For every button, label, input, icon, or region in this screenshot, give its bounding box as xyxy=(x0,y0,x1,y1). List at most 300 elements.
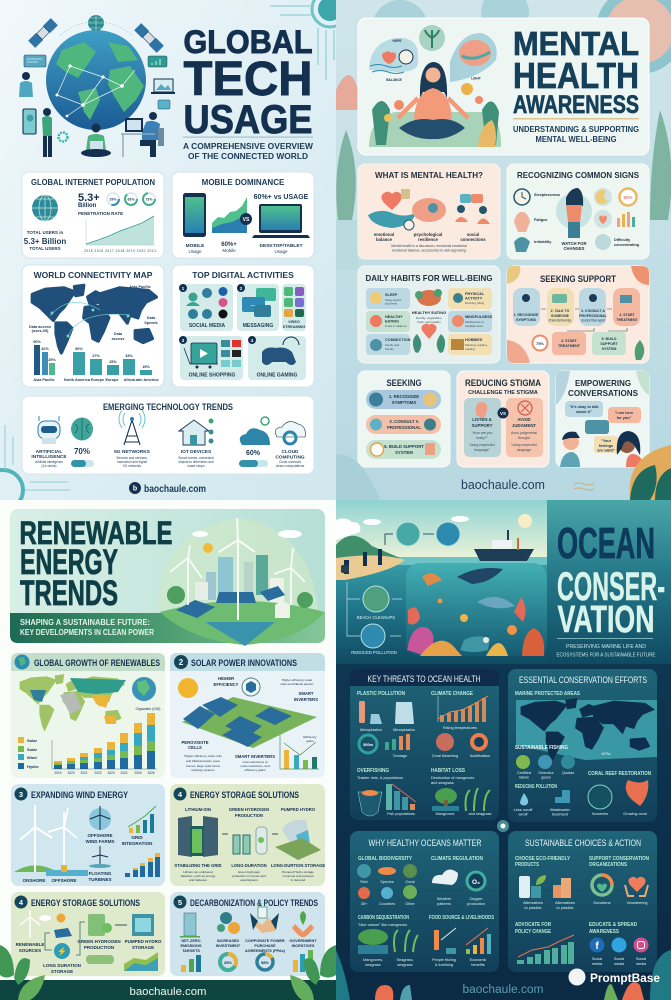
panel: why healthy oceans matter: Mangroves, xyxy=(363,958,383,962)
panel: why healthy oceans matter: seagrass xyxy=(365,963,381,967)
logo: promptbase watermark: PromptBase xyxy=(590,971,660,985)
panel: solar power innovations: Cost reductions of xyxy=(243,760,268,764)
panel: top digital activities: TOP DIGITAL ACTIVITIES xyxy=(192,270,294,280)
panel: world connectivity map: Data access xyxy=(29,325,51,329)
panel: essential conservation efforts: Growing coral xyxy=(623,812,647,816)
panel: emerging technology trends xyxy=(22,396,314,474)
title xyxy=(184,24,312,142)
panel: energy storage solutions bottom: SOURCES xyxy=(19,948,41,953)
illustration: clean energy city xyxy=(158,518,325,646)
logo: baochaule.com: baochaule.com xyxy=(144,484,206,495)
panel: reducing stigma: SUPPORT xyxy=(472,423,493,428)
panel: mobile dominance: 60%+ vs USAGE xyxy=(254,194,309,201)
panel: essential conservation efforts: Nurseries xyxy=(592,812,608,816)
panel: solar power innovations: SMART xyxy=(299,691,314,696)
panel: why healthy oceans matter: Coral xyxy=(405,880,415,884)
panel: global growth of renewables: 2021 xyxy=(80,771,88,775)
panel: mobile dominance: Usage xyxy=(188,249,202,254)
panel: recognizing common signs xyxy=(507,164,649,259)
panel: world connectivity map: Europe xyxy=(105,378,119,382)
panel: energy storage solutions top xyxy=(170,784,325,886)
panel: key threats to ocean health xyxy=(350,669,499,820)
panel: decarbonization and policy trends xyxy=(170,892,325,976)
panel: emerging technology trends: instruction and signal xyxy=(117,460,147,464)
icon: standing woman xyxy=(42,108,52,157)
icon: circuit decoration top right xyxy=(270,0,348,80)
panel: daily habits: HEALTHY xyxy=(385,315,403,319)
panel: why healthy oceans matter: O₂ xyxy=(472,879,480,886)
subtitle: OF THE CONNECTED WORLD xyxy=(188,152,308,161)
panel: energy storage solutions top: production in homes and xyxy=(232,874,266,878)
panel: seeking xyxy=(358,371,450,467)
panel: recognizing common signs: RECOGNIZING COMMON SIGNS xyxy=(517,170,639,180)
panel: top digital activities: 3 xyxy=(182,338,185,343)
panel: emerging technology trends: INTELLIGENCE xyxy=(31,454,67,460)
panel: daily habits: food heal xyxy=(385,302,397,306)
icon: earth globe network xyxy=(46,30,146,130)
panel: what is mental health: Mental health is a discussion, emotional emotional xyxy=(391,244,467,248)
panel: emerging technology trends: 70% xyxy=(74,447,90,456)
title xyxy=(557,519,665,641)
footer bar xyxy=(0,980,336,1000)
title: RENEWABLE xyxy=(20,515,172,551)
panel: mobile dominance xyxy=(172,172,314,258)
panel: emerging technology trends: 5G networks xyxy=(123,464,141,468)
icon: phone left xyxy=(23,109,36,134)
panel: decarbonization and policy trends: DECARBONIZATION & POLICY TRENDS xyxy=(190,898,318,908)
panel: solar power innovations: EFFICIENCY xyxy=(214,682,239,687)
panel: essential conservation efforts: SUSTAINABLE FISHING xyxy=(515,745,568,751)
panel: global internet population: 5.3+ xyxy=(78,192,100,204)
panel: empowering conversations: feelings xyxy=(599,444,613,448)
icon: circuit decoration bottom left xyxy=(0,425,70,510)
panel: seeking: SEEKING xyxy=(386,378,422,388)
panel: sustainable choices and action: AWARENESS xyxy=(589,929,620,935)
panel: essential conservation efforts: gears xyxy=(541,776,551,780)
panel: seeking support: 1. RECOGNIZE xyxy=(514,313,539,317)
panel: global growth of renewables xyxy=(11,653,165,778)
panel: energy storage solutions bottom: LONG DURATION xyxy=(43,963,81,968)
decorative background plants xyxy=(336,0,671,270)
panel: solar power innovations: Efficiency xyxy=(303,735,317,739)
panel: world connectivity map: (uses-05) xyxy=(32,329,49,333)
icon: corner leaves right xyxy=(290,945,336,1000)
subtitle: PRESERVING MARINE LIFE AND xyxy=(566,644,646,650)
panel: recognizing common signs: concentrating xyxy=(614,243,640,247)
panel: decarbonization and policy trends: 35% xyxy=(224,960,232,965)
panel: expanding wind energy: OFFSHORE xyxy=(51,878,77,883)
illustration: ocean hero: BEACH CLEANUPS xyxy=(357,615,395,620)
panel: seeking support: (friends/family) xyxy=(549,318,571,322)
panel: decarbonization and policy trends: EMISSIONS xyxy=(180,944,202,948)
panel: reducing stigma: CHALLENGE THE STIGMA xyxy=(468,390,538,396)
panel: key threats to ocean health: HABITAT LOSS xyxy=(431,768,466,774)
panel: seeking support: SYMPTOMS xyxy=(516,318,537,322)
panel: solar power innovations: Higher efficiency solar cells xyxy=(184,754,222,758)
panel: daily habits: ACTIVITY xyxy=(465,296,483,300)
panel: sustainable choices and action: Social xyxy=(614,957,624,961)
panel: energy storage solutions top: LITHIUM-ION xyxy=(185,807,211,812)
panel: daily habits: CONNECTION xyxy=(385,338,411,342)
panel: solar power innovations: costs reductions, and xyxy=(240,764,270,768)
panel: world connectivity map: Asia Pacific xyxy=(33,378,55,382)
panel: seeking support: 5. BUILD xyxy=(602,337,617,341)
panel: hero xyxy=(10,509,325,646)
panel: decarbonization and policy trends: PURCHASE xyxy=(254,944,276,948)
panel: ocean conservation infographic xyxy=(336,500,671,1000)
panel: energy storage solutions bottom: ENERGY STORAGE SOLUTIONS xyxy=(31,898,140,908)
panel: key threats to ocean health: Coral bleaching xyxy=(432,754,458,758)
panel: sustainable choices and action: media xyxy=(614,962,625,966)
icon: laptop right xyxy=(151,79,175,94)
panel: global internet population: 29% xyxy=(109,198,117,202)
panel: energy storage solutions bottom xyxy=(11,892,165,976)
panel: why healthy oceans matter: 35+ xyxy=(361,902,368,906)
panel: energy storage solutions bottom: PUMPED HYDRO xyxy=(125,939,162,944)
panel: essential conservation efforts xyxy=(508,669,657,822)
panel: sustainable choices and action: Alternatives xyxy=(523,901,543,905)
panel: mobile dominance: VS xyxy=(243,217,250,223)
panel: what is mental health: resilience xyxy=(418,237,439,242)
icon: chat bubble left xyxy=(24,55,46,67)
panel: global growth of renewables: 2019 xyxy=(54,771,62,775)
panel: sustainable choices and action: CHOOSE ECO-FRIENDLY xyxy=(515,856,571,862)
panel: seeking support: 4. START xyxy=(619,313,636,317)
panel: world connectivity map: WORLD CONNECTIVITY MAP xyxy=(34,270,153,280)
panel: essential conservation efforts: treatment xyxy=(552,812,569,816)
panel: seeking: SYMPTOMS xyxy=(392,400,416,405)
panel: key threats to ocean health: Fish populations xyxy=(387,812,415,816)
panel: reducing stigma: REDUCING STIGMA xyxy=(465,378,541,388)
panel: daily habits: Family and xyxy=(385,343,400,347)
panel: daily habits: SLEEP xyxy=(385,293,398,297)
panel: why healthy oceans matter: Species xyxy=(380,880,394,884)
title: TECH xyxy=(184,53,312,106)
panel: why healthy oceans matter: production xyxy=(467,902,485,906)
panel: global growth of renewables: 2023 xyxy=(107,771,115,775)
panel: essential conservation efforts: Wastewater xyxy=(550,808,571,812)
panel: seeking support xyxy=(507,266,649,363)
panel: emerging technology trends: Smart homes, connected xyxy=(178,456,214,460)
panel: empowering conversations: EMPOWERING xyxy=(575,378,631,388)
panel: daily habits: MINDFULNESS xyxy=(465,315,493,319)
panel: expanding wind energy: EXPANDING WIND ENERGY xyxy=(31,790,128,800)
panel: energy storage solutions top: PUMPED HYDRO xyxy=(281,807,316,812)
subtitle: A COMPREHENSIVE OVERVIEW xyxy=(183,142,313,151)
panel: emerging technology trends: ARTIFICIAL xyxy=(36,449,62,455)
panel: why healthy oceans matter: GLOBAL BIODIVERSITY xyxy=(358,856,413,862)
panel: solar power innovations xyxy=(170,653,325,778)
panel: daily habits: Sleep Hours, xyxy=(385,298,402,302)
panel: daily habits: Fruits in salad so xyxy=(385,324,407,328)
panel: global growth of renewables: 2024 xyxy=(120,771,128,775)
footer url: baochaule.com xyxy=(462,984,544,996)
panel: solar power innovations: homes, large solar farms xyxy=(186,764,220,768)
subtitle: UNDERSTANDING & SUPPORTING xyxy=(513,125,639,134)
panel: decarbonization and policy trends: 5 xyxy=(178,898,182,907)
panel: top digital activities: 1 xyxy=(182,286,185,291)
illustration: ocean hero: REDUCED POLLUTION xyxy=(351,650,397,655)
panel: daily habits: HOBBIES xyxy=(465,338,483,342)
panel: energy storage solutions top: STABILIZING THE GRID xyxy=(174,863,222,868)
panel: empowering conversations: about it" xyxy=(576,410,592,414)
panel: sustainable choices and action: to plastics xyxy=(525,906,542,910)
panel: expanding wind energy: INTEGRATION xyxy=(122,841,152,846)
panel: daily habits: Running, lifting xyxy=(465,301,485,305)
panel: mobile dominance: Mobile xyxy=(222,248,236,253)
panel: daily habits: PHYSICAL xyxy=(465,292,485,296)
icon: gear xyxy=(58,132,68,142)
panel: world connectivity map: North America Europe xyxy=(64,378,104,382)
title xyxy=(20,515,172,613)
panel: world connectivity map: 60% xyxy=(33,340,41,344)
panel: global internet population: TOTAL USERS in xyxy=(27,230,63,235)
panel: reducing stigma: "How are you xyxy=(472,431,492,435)
panel: daily habits: meditate area xyxy=(465,324,483,328)
panel: seeking support: 4. START xyxy=(561,339,578,343)
panel: sustainable choices and action: ADVOCATE FOR xyxy=(515,922,551,928)
title: USAGE xyxy=(184,98,312,142)
title: HEALTH xyxy=(513,55,639,96)
panel: recognizing common signs: Irritability xyxy=(534,240,552,244)
panel: empowering conversations: for you" xyxy=(617,416,632,420)
panel: energy storage solutions bottom: STORAGE xyxy=(132,945,154,950)
panel: essential conservation efforts: wnoff xyxy=(518,812,528,816)
panel: seeking support: TREATMENT xyxy=(616,318,639,322)
panel: emerging technology trends: Artificial intelligence xyxy=(35,460,63,464)
panel: world connectivity map: 15% xyxy=(142,365,150,369)
panel: energy storage solutions top: commute and pumped xyxy=(283,874,314,878)
panel: what is mental health: emotional balance, accessories to well-approving xyxy=(392,248,466,252)
panel: reducing stigma: really?" xyxy=(476,436,489,440)
panel: reducing stigma: AVOID xyxy=(517,417,531,422)
icon: top mini globe xyxy=(60,15,132,35)
panel: expanding wind energy: GRID xyxy=(131,835,143,840)
panel: seeking support: SOMEONE xyxy=(551,314,570,318)
panel: solar power innovations: tracking systems xyxy=(191,768,215,772)
panel: daily habits: friends xyxy=(385,347,394,351)
panel: global internet population: PENETRATION RATE xyxy=(78,211,123,216)
panel: reducing stigma: thought xyxy=(518,436,530,440)
panel: sustainable choices and action: to plastics xyxy=(557,906,574,910)
panel: world connectivity map: Data xyxy=(114,332,123,336)
panel: emerging technology trends: 5G NETWORKS xyxy=(114,449,151,455)
panel: world connectivity map: Data xyxy=(147,316,156,320)
panel: mobile dominance: 60%+ xyxy=(221,242,237,248)
panel: why healthy oceans matter: People fishing xyxy=(432,958,456,962)
panel: seeking support: SYSTEM xyxy=(602,347,616,351)
panel: energy storage solutions top: Lithium-ion embraced xyxy=(183,870,213,874)
panel: essential conservation efforts: Certified xyxy=(517,771,531,775)
panel: energy storage solutions top: in demand xyxy=(291,878,306,882)
panel: sustainable choices and action: f xyxy=(595,941,599,952)
panel: world connectivity map xyxy=(22,265,164,387)
panel: top digital activities xyxy=(172,265,314,387)
panel: solar power innovations: PEROVSKITE xyxy=(182,740,209,745)
subtitle xyxy=(20,618,154,637)
panel: seeking support: doctor/therapist xyxy=(581,318,605,322)
subtitle xyxy=(183,136,313,161)
panel: solar power innovations: SOLAR POWER INNOVATIONS xyxy=(191,658,297,668)
panel: essential conservation efforts: CORAL REEF RESTORATION xyxy=(588,771,651,777)
panel: key threats to ocean health: Microplastics xyxy=(393,728,415,732)
panel: mobile dominance: DESKTOP/TABLET xyxy=(260,243,303,249)
panel: energy storage solutions bottom: GREEN HYDROGEN xyxy=(77,939,121,944)
subtitle: KEY DEVELOPMENTS IN CLEAN POWER xyxy=(20,628,154,637)
icon: woman with phone xyxy=(19,72,33,97)
panel: daily habits: HEALTHY EATING xyxy=(412,310,446,315)
subtitle xyxy=(513,118,639,144)
panel: emerging technology trends: COMPUTING xyxy=(275,454,305,460)
panel: energy storage solutions bottom: RENEWABLE xyxy=(16,942,44,947)
panel: seeking: PROFESSIONAL xyxy=(387,425,421,430)
panel: energy storage solutions top: Green hydrogen xyxy=(238,870,260,874)
panel: seeking support: 2. TALK TO xyxy=(551,309,570,313)
panel: emerging technology trends: 60% xyxy=(246,450,261,457)
panel: key threats to ocean health: Acidification xyxy=(470,754,490,758)
panel: global growth of renewables: Hydro xyxy=(27,764,39,769)
panel: global internet population: GLOBAL INTERNET POPULATION xyxy=(31,178,155,187)
icon: sitting person xyxy=(81,124,111,157)
subtitle xyxy=(556,638,656,658)
title: TRENDS xyxy=(20,574,118,613)
panel: decarbonization and policy trends: AGREEMENTS (PPAs) xyxy=(245,949,286,953)
panel: energy storage solutions bottom: ⚡ xyxy=(57,946,67,956)
title xyxy=(513,25,639,119)
panel: recognizing common signs: CHANGES xyxy=(564,246,585,251)
panel: reducing stigma: language" xyxy=(474,448,491,452)
footer bar: baochaule.com xyxy=(130,986,206,998)
panel: emerging technology trends: Cloud connects xyxy=(279,460,301,464)
title: ENERGY xyxy=(20,543,118,582)
panel: solar power innovations: Higher efficiency solar xyxy=(282,678,312,682)
panel: daily habits: Painting, reading, xyxy=(465,343,488,347)
panel: empowering conversations: are valid" xyxy=(597,448,615,452)
panel: solar power innovations: gains xyxy=(306,739,314,743)
panel: seeking support: 75% xyxy=(536,341,544,346)
panel: key threats to ocean health: Microplastics xyxy=(360,728,382,732)
panel: emerging technology trends: Sensors and services, xyxy=(116,456,148,460)
panel: essential conservation efforts: REDUCING POLLUTION xyxy=(515,784,557,790)
panel: decarbonization and policy trends: 58% xyxy=(261,960,269,965)
panel: hero xyxy=(358,18,649,155)
panel: emerging technology trends: smart shops xyxy=(187,464,205,468)
panel: world connectivity map: Asia-Pacific xyxy=(129,285,151,289)
panel: seeking support: SEEKING SUPPORT xyxy=(540,274,616,284)
panel: sustainable choices and action: ORGANIZATIONS xyxy=(589,862,628,868)
panel: top digital activities: MESSAGING xyxy=(243,323,273,329)
panel: expanding wind energy: FLOATING xyxy=(89,871,112,876)
panel: daily habits: DAILY HABITS FOR WELL-BEING xyxy=(366,273,493,283)
panel: why healthy oceans matter: CLIMATE REGULATION xyxy=(431,856,483,862)
panel: top digital activities: ... xyxy=(251,302,256,308)
panel: world connectivity map: 27% xyxy=(92,354,100,358)
icon: satellite right xyxy=(134,23,164,53)
panel: empowering conversations xyxy=(556,371,649,467)
illustration: meditating woman xyxy=(369,25,501,147)
subtitle: SHAPING A SUSTAINABLE FUTURE: xyxy=(20,618,150,627)
illustration: meditating woman: BALANCE xyxy=(386,78,402,82)
panel: mobile dominance: MOBILE DOMINANCE xyxy=(202,178,285,187)
panel: sustainable choices and action: Alternatives xyxy=(555,901,575,905)
panel: world connectivity map: 42% xyxy=(41,347,49,351)
panel: energy storage solutions top: PRODUCTION xyxy=(235,813,263,818)
panel: essential conservation efforts: MARINE PROTECTED AREAS xyxy=(515,691,581,697)
panel: key threats to ocean health: Mangroves xyxy=(436,812,454,816)
panel: global growth of renewables: 2020 xyxy=(67,771,75,775)
panel: daily habits: reading xyxy=(465,347,475,351)
panel: energy storage solutions top: LONG-DURATION xyxy=(231,863,267,868)
panel: expanding wind energy: ONSHORE xyxy=(23,878,45,883)
panel: reducing stigma: Asso judgmental xyxy=(511,431,537,435)
icon: corner leaves left xyxy=(0,945,45,1000)
panel: key threats to ocean health: 300m xyxy=(363,742,374,747)
panel: world connectivity map: 33% xyxy=(125,354,133,358)
logo: baochaule.com: b xyxy=(133,486,137,492)
panel: empowering conversations: "It's okay to talk xyxy=(569,405,599,409)
panel: daily habits: Freshly, vegetables, xyxy=(416,316,442,320)
panel: key threats to ocean health: and seagrass xyxy=(431,781,454,785)
panel: energy storage solutions top: and batteries xyxy=(189,878,207,882)
panel: mobile dominance: Usage xyxy=(274,249,288,254)
panel: why healthy oceans matter: Oxygen xyxy=(469,897,483,901)
panel: expanding wind energy: 3 xyxy=(19,790,23,799)
panel: sustainable choices and action: PRODUCTS xyxy=(515,862,540,868)
panel: emerging technology trends: objects to dimension and xyxy=(178,460,214,464)
panel: why healthy oceans matter: Weather xyxy=(437,897,452,901)
panel: seeking: 3. CONSULT A xyxy=(389,419,419,424)
panel: energy storage solutions bottom: PRODUCTION xyxy=(84,945,114,950)
panel: key threats to ocean health: OVERFISHING xyxy=(357,768,389,774)
panel: global growth of renewables: Gigawatts (GW) xyxy=(136,707,160,711)
panel: why healthy oceans matter: "blue carbon" like mangroves xyxy=(358,923,407,927)
panel: global growth of renewables: Wind xyxy=(27,755,37,760)
panel: emerging technology trends: CLOUD xyxy=(281,449,299,455)
panel: daily habits xyxy=(358,266,500,363)
panel: why healthy oceans matter: Other xyxy=(405,902,415,906)
panel: key threats to ocean health: KEY THREATS TO OCEAN HEALTH xyxy=(368,674,480,684)
panel: top digital activities: STREAMING xyxy=(283,325,305,329)
panel: key threats to ocean health: Trawler nets, & populations xyxy=(357,776,403,780)
panel: global growth of renewables: Solar xyxy=(27,738,37,743)
panel: solar power innovations: INVERTERS xyxy=(294,697,318,702)
icon: satellite left xyxy=(28,18,58,48)
panel: sustainable choices and action: Donations xyxy=(593,901,611,905)
panel: solar power innovations: cells and bifacial panels. xyxy=(280,682,314,686)
panel: energy storage solutions top: LONG-DURTION STORAGE xyxy=(271,863,325,868)
panel: reducing stigma: VS xyxy=(500,411,506,416)
panel: essential conservation efforts: MPAs xyxy=(601,752,611,756)
panel: emerging technology trends: EMERGING TECHNOLOGY TRENDS xyxy=(103,402,233,412)
title: MENTAL xyxy=(513,25,639,62)
panel: seeking support: 3. CONSULT A xyxy=(581,309,605,313)
panel: why healthy oceans matter: seagrass xyxy=(397,963,413,967)
panel: seeking support: PROFESSIONAL xyxy=(579,314,608,318)
panel: sustainable choices and action: POLICY CHANGE xyxy=(515,929,552,935)
panel: top digital activities: SOCIAL MEDIA xyxy=(189,323,226,329)
panel: world connectivity map: 25% xyxy=(48,358,56,362)
panel: global internet population: 73% xyxy=(145,198,153,202)
panel: decarbonization and policy trends: INVESTMENT xyxy=(216,944,241,948)
panel: global internet population: 63% xyxy=(127,198,135,202)
panel: reducing stigma: JUDGMENT xyxy=(512,423,536,428)
panel: decarbonization and policy trends: TARGETS xyxy=(182,949,200,953)
panel: solar power innovations: SMART INVERTERS xyxy=(235,754,275,759)
panel: key threats to ocean health: PLASTIC POLLUTION xyxy=(357,691,405,697)
panel: world connectivity map: access xyxy=(112,337,124,341)
panel: energy storage solutions top: ENERGY STORAGE SOLUTIONS xyxy=(190,790,299,800)
panel: daily habits: EATING xyxy=(385,320,399,324)
